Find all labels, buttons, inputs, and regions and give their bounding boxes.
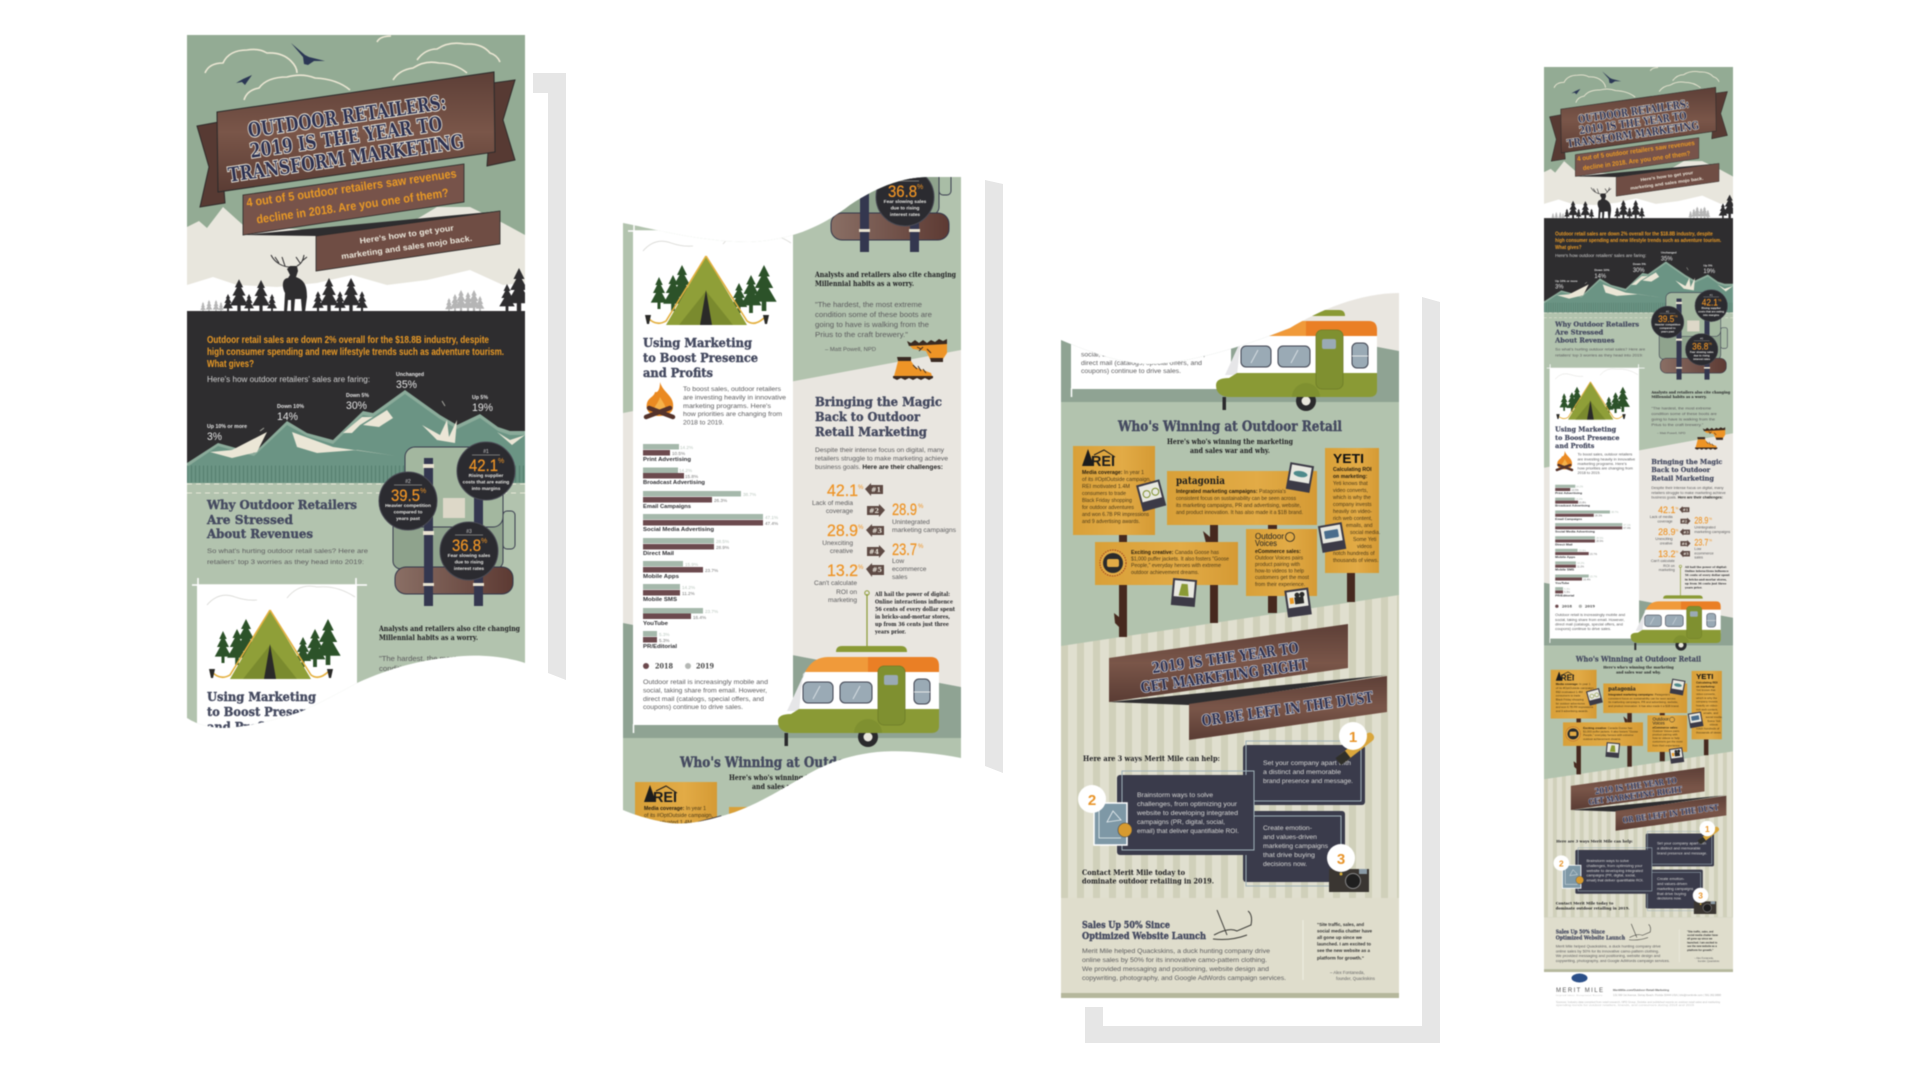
orange intro text — [207, 334, 504, 370]
sign: Yeti: Yeti knows that — [1333, 481, 1368, 487]
priorities intro text: marketing programs. Here's — [683, 403, 772, 410]
bar chart: marketing priorities 2018 vs 2019: 26.3% — [714, 498, 727, 503]
box 3: that drive buying — [1263, 852, 1315, 859]
sign posts — [1114, 525, 1355, 637]
sign: Canada Goose: $1,000 puffer jackets. It also fosters "Goose — [1131, 556, 1229, 562]
panel 3: winners, call to action and case study — [1060, 292, 1400, 998]
worry 2 — [379, 472, 437, 530]
challenge 4: 23.7 — [892, 540, 917, 559]
footer with Merit Mile logo: spending trends for outdoor retailers, brands, and consumers during 2018 and 2019 — [1556, 1004, 1695, 1007]
dark band: sales overview with mountain chart — [187, 311, 525, 493]
digital callout text — [874, 592, 955, 636]
mountain chart labels: 3% — [207, 431, 222, 443]
icon: Canada Goose badge — [1100, 550, 1126, 576]
white panel top edge — [196, 585, 358, 728]
sign: Yeti: heavily on video- — [1333, 509, 1372, 515]
icon: deer — [271, 255, 307, 312]
sign: Outdoor Voices: Outdoor Voices pairs — [1255, 556, 1304, 562]
icon: Merit Mile logo — [1572, 974, 1588, 982]
challenge 3: Unexciting — [822, 540, 853, 547]
worry 1 — [457, 442, 515, 500]
sign: Canada Goose — [1095, 542, 1238, 585]
banner: 2019 is the year — [1109, 624, 1348, 702]
chart legend: 2018 — [655, 662, 673, 670]
light green background band — [187, 482, 525, 777]
case study text: online sales by 50% for its innovative camo-pattern clothing. — [1082, 957, 1267, 964]
box 2: campaigns (PR, digital, social, — [1137, 819, 1225, 826]
contact line: dominate outdoor retailing in 2019. — [1082, 876, 1214, 886]
sign: Yeti: thousands of views. — [1333, 558, 1379, 564]
banner: 2019 is the year: 2019 IS THE YEAR TO — [1151, 639, 1300, 677]
worry 3: #3 — [466, 529, 472, 535]
clouds — [205, 36, 500, 100]
box 3: marketing campaigns — [1263, 843, 1329, 850]
footer with Merit Mile logo: Inspired Ideas. Exceptional Results. — [1556, 994, 1603, 997]
case study text: We provided messaging and positioning, website design and — [1082, 966, 1269, 973]
who's winning section — [1073, 419, 1380, 637]
millennial habits text and quote: condition some of these boots are — [815, 310, 932, 319]
priorities intro text: 2018 to 2019. — [683, 420, 724, 426]
challenges intro text: business goals. Here are their challenges: — [815, 464, 943, 471]
bar chart: marketing priorities 2018 vs 2019: 14.2% — [682, 585, 695, 590]
white panel bottom part — [1071, 295, 1231, 389]
mobile and social text — [634, 679, 768, 733]
step 3 badge with camera: 3 — [1337, 851, 1345, 868]
priorities content — [643, 382, 786, 670]
worry 3 — [440, 522, 498, 580]
challenge 5: #5 — [872, 566, 882, 574]
mojo ribbon: marketing and sales mojo back. — [341, 234, 473, 261]
sign: Outdoor Voices: eCommerce sales: — [1255, 549, 1301, 555]
beige band and trailer hill — [623, 350, 961, 738]
case study text: copywriting, photography, and Google AdWords campaign services. — [1082, 975, 1286, 982]
bar chart: marketing priorities 2018 vs 2019: Mobile Apps — [643, 574, 679, 580]
footer with Merit Mile logo: 131 NW 1st Avenue, Delray Beach, Florida 33444 USA | info@meritmile.com | 561.362.8888 — [1613, 994, 1722, 997]
challenge 1: 42.1 — [827, 481, 858, 500]
worry 1: #1 — [483, 449, 489, 455]
testimonial quote — [1317, 922, 1375, 981]
call to action section — [1078, 624, 1387, 892]
box 1: a distinct and memorable — [1263, 769, 1341, 776]
sign: Yeti: notch hundreds of — [1333, 551, 1375, 557]
sign: Canada Goose: People," everyday heroes with extreme — [1131, 563, 1221, 569]
challenge 3 — [822, 521, 884, 555]
heading: who's winning: Who's Winning at Outdoor Retail — [1117, 419, 1342, 435]
icon: campfire — [646, 382, 673, 417]
sign: Yeti: Some Yeti — [1353, 537, 1376, 543]
contact line — [1082, 868, 1214, 886]
sign: Patagonia: patagonia — [1176, 476, 1225, 487]
testimonial quote: – Alex Fontaneda, — [1330, 970, 1365, 975]
bar chart: marketing priorities 2018 vs 2019: 5.3% — [659, 632, 669, 637]
icon: hiking boots — [893, 339, 947, 380]
mountain chart labels: 14% — [277, 411, 298, 423]
footer with Merit Mile logo — [1556, 974, 1722, 1007]
chart legend: 2019 — [696, 662, 714, 670]
challenge 5: Can't calculate — [814, 580, 857, 587]
heading: using marketing: and Profits — [643, 365, 713, 380]
sign: Patagonia — [1167, 471, 1317, 525]
sign: Patagonia: Integrated marketing campaigns: Patagonia's — [1176, 489, 1286, 495]
challenge 1: coverage — [826, 508, 853, 515]
heading: why retailers are stressed — [206, 497, 368, 566]
worries intro text: So what's hurting outdoor retail sales? Here are — [207, 548, 368, 555]
challenge 5 — [814, 561, 884, 604]
panel 1: hero, sales overview and revenue worries — [186, 34, 526, 729]
sign: REI: for outdoor adventures — [1082, 505, 1134, 511]
bar chart: marketing priorities 2018 vs 2019: 15.8% — [685, 474, 698, 479]
sign: REI: and won 6.7B PR impressions — [1082, 512, 1149, 518]
bar chart: marketing priorities 2018 vs 2019: 23.7% — [705, 609, 718, 614]
step 1 badge with champagne bottle: 1 — [1349, 729, 1357, 746]
sign: REI: consumers to trade — [1082, 491, 1126, 497]
case study section — [1082, 910, 1375, 982]
bar chart: marketing priorities 2018 vs 2019: 28.9% — [716, 545, 729, 550]
case study text: Merit Mile helped Quackskins, a duck hunting company drive — [1082, 948, 1270, 955]
tent and marketing heading — [628, 224, 803, 380]
heading: bringing the magic — [815, 394, 942, 439]
bar chart: marketing priorities 2018 vs 2019: 14.2% — [679, 468, 692, 473]
mobile and social text: Outdoor retail is increasingly mobile and — [643, 679, 768, 686]
bar chart: marketing priorities 2018 vs 2019: 10.5% — [672, 451, 685, 456]
main title ribbon: 2019 IS THE YEAR TO — [248, 111, 444, 163]
testimonial quote: launched. I am excited to — [1317, 942, 1371, 948]
challenge 2: Unintegrated — [892, 519, 930, 526]
challenge 5: ROI on — [836, 589, 857, 596]
icon: camper trailer — [778, 591, 939, 747]
case study text — [1082, 948, 1286, 982]
worry 3: % — [481, 538, 487, 545]
subheading — [1167, 437, 1293, 455]
priorities intro text: To boost sales, outdoor retailers — [683, 386, 782, 393]
box 2: Brainstorm ways to solve — [1137, 792, 1213, 799]
priorities intro text: are investing heavily in innovative — [683, 394, 786, 402]
box 3 — [1243, 811, 1345, 886]
worries intro text: retailers' top 3 worries as they head into 2019: — [207, 559, 364, 566]
challenge 4 — [867, 540, 927, 581]
sign: Patagonia: its marketing campaigns, PR and advertising, website, — [1176, 503, 1301, 509]
heading: bringing the magic: Back to Outdoor — [815, 409, 920, 424]
challenge 5: % — [858, 565, 864, 571]
sign: Outdoor Voices: Outdoor — [1255, 531, 1284, 541]
box 2 — [1117, 771, 1254, 855]
heading: sales up 50% — [1082, 920, 1206, 942]
bar chart: marketing priorities 2018 vs 2019: Direct Mail — [643, 551, 675, 557]
worry 3: interest rates — [454, 566, 484, 572]
challenges intro text — [815, 447, 948, 471]
bar chart: marketing priorities 2018 vs 2019: Broadcast Advertising — [643, 480, 705, 486]
step 3 badge with camera — [1327, 844, 1369, 892]
worry 2: Heavier competition — [385, 503, 431, 509]
box 3: Create emotion- — [1263, 825, 1312, 832]
challenge 5: marketing — [828, 597, 857, 604]
orange intro text: What gives? — [207, 358, 254, 370]
mobile and social text: social, taking share from email. However, — [643, 688, 767, 694]
worry 1: % — [498, 458, 504, 465]
box 2: website to developing integrated — [1136, 810, 1238, 817]
priorities intro text: how priorities are changing from — [683, 411, 782, 418]
sign: REI: Media coverage: In year 1 — [1082, 470, 1144, 476]
testimonial quote: "Site traffic, sales, and — [1317, 922, 1364, 928]
bar chart: marketing priorities 2018 vs 2019: 14.2% — [680, 445, 693, 450]
worry 2: 39.5 — [391, 486, 420, 505]
testimonial quote: social media chatter have — [1317, 928, 1372, 934]
box 3: decisions now. — [1263, 861, 1307, 868]
backpack with top three worries — [379, 442, 515, 606]
icon: backpack — [393, 447, 515, 606]
challenge 2 — [867, 500, 957, 534]
bar chart: marketing priorities 2018 vs 2019 — [643, 444, 778, 650]
footer with Merit Mile logo: Sources: Industry data compiled from retail research, NPD Group, Deloitte and published reports on outdoor retail sales and marketing — [1556, 1001, 1721, 1004]
worry 2: years past — [396, 516, 420, 522]
testimonial quote: see the new website as a — [1317, 948, 1370, 954]
challenge 1: Lack of media — [812, 500, 853, 507]
sign: Yeti: Calculating ROI — [1333, 467, 1372, 473]
millennial habits text and quote: Millennial habits as a worry. — [815, 279, 914, 288]
white marketing panel — [633, 231, 793, 725]
worry 3: Fear slowing sales — [448, 553, 491, 559]
sign: Yeti: emails, and — [1346, 523, 1373, 529]
challenge 3: creative — [830, 548, 853, 555]
challenge 4: % — [918, 544, 924, 550]
worry 1: 42.1 — [469, 456, 498, 475]
footer with Merit Mile logo: MERIT MILE — [1556, 988, 1603, 994]
panel 2: marketing priorities and challenges — [622, 176, 962, 824]
heading: why retailers are stressed: Why Outdoor Retailers — [206, 497, 357, 512]
heading: bringing the magic: Bringing the Magic — [815, 394, 942, 409]
bar chart: marketing priorities 2018 vs 2019: 47.4% — [765, 521, 778, 526]
priorities intro text — [683, 386, 786, 426]
sign: Yeti: YETI — [1333, 451, 1364, 466]
challenge 4: ecommerce — [892, 566, 927, 573]
sign: Yeti: company invests — [1333, 502, 1372, 508]
sign: Outdoor Voices — [1246, 529, 1317, 596]
icon: cooler photo — [1318, 522, 1346, 553]
full-length infographic — [1544, 67, 1736, 972]
bar chart: marketing priorities 2018 vs 2019: Print Advertising — [643, 457, 691, 463]
challenges intro text: Despite their intense focus on digital, many — [815, 447, 945, 454]
sign: Outdoor Voices: customers get the most — [1255, 575, 1309, 581]
bar chart: marketing priorities 2018 vs 2019: 11.2% — [682, 591, 695, 596]
sign: REI: REI motivated 1.4M — [1082, 484, 1130, 490]
mountain illustration — [187, 390, 525, 483]
millennial habits text and quote: going to have is walking from the — [815, 320, 929, 329]
subheading: Here's who's winning the marketing — [1167, 437, 1293, 446]
bar chart: marketing priorities 2018 vs 2019: 28.5% — [716, 539, 729, 544]
sign: Yeti: on marketing: — [1333, 474, 1368, 480]
chart intro: Here's how outdoor retailers' sales are faring: — [207, 375, 370, 384]
icon: jacket photo — [1171, 578, 1197, 607]
worry 3: 36.8 — [452, 536, 481, 555]
sign: Outdoor Voices: from their experience. — [1255, 582, 1305, 588]
heading: sales up 50%: Sales Up 50% Since — [1082, 920, 1170, 931]
challenges section — [812, 394, 957, 636]
sign: REI: of its #OptOutside campaign, — [1082, 477, 1151, 483]
lower green band — [622, 738, 962, 817]
intro line: three ways: Here are 3 ways Merit Mile can help: — [1083, 754, 1220, 763]
icon: duck and shotgun — [1213, 910, 1252, 940]
subhead ribbon: 4 out of 5 outdoor retailers saw revenues — [246, 166, 458, 210]
sign: Canada Goose: Exciting creative: Canada Goose has — [1131, 550, 1219, 556]
digital callout text: years prior. — [874, 630, 906, 636]
heading: why retailers are stressed: Are Stressed — [206, 512, 293, 527]
mountain chart labels: Down 5% — [346, 393, 370, 399]
main title ribbon: OUTDOOR RETAILERS: — [246, 90, 448, 142]
footer with Merit Mile logo: MeritMile.com/Outdoor-Retail-Marketing — [1613, 988, 1669, 992]
challenge 4: #4 — [869, 548, 879, 556]
mountain chart labels: 35% — [396, 379, 417, 391]
testimonial quote: all gone up since we — [1317, 935, 1362, 941]
sign: Yeti: video converts, — [1333, 488, 1368, 494]
icon: bicycle photo — [1136, 479, 1166, 512]
bar chart: marketing priorities 2018 vs 2019: Mobile SMS — [643, 597, 677, 603]
contact line: Contact Merit Mile today to — [1082, 868, 1185, 877]
sign: Yeti: social media. — [1350, 530, 1380, 536]
panel 4: full infographic overview with footer — [1543, 66, 1734, 1007]
step 2 badge with blueprint: 2 — [1088, 792, 1096, 809]
box 1: Set your company apart with — [1263, 760, 1351, 767]
millennial habits text and quote: – Matt Powell, NPD — [825, 347, 876, 353]
challenge 1: % — [858, 485, 864, 491]
bar chart: marketing priorities 2018 vs 2019: 5.3% — [659, 638, 669, 643]
icon: video camera photo — [1284, 587, 1312, 618]
subhead ribbon — [243, 164, 464, 235]
challenge 3: % — [858, 525, 864, 531]
icon: REI logo: REI — [1091, 453, 1115, 470]
heading: why retailers are stressed: About Revenues — [206, 526, 313, 541]
mojo ribbon: Here's how to get your — [359, 223, 454, 246]
challenge 2: % — [918, 504, 924, 510]
bar chart: marketing priorities 2018 vs 2019: 38.7% — [743, 492, 756, 497]
icon: tent with trees — [643, 232, 791, 325]
bar chart: marketing priorities 2018 vs 2019: PR/Editorial — [643, 644, 678, 650]
sign: Yeti: which is why the — [1333, 495, 1371, 501]
mountain chart labels — [207, 372, 493, 443]
box 3: and values-driven — [1263, 834, 1317, 841]
millennial habits text and quote: Prius to the craft brewery." — [815, 330, 908, 339]
mountain chart labels: 30% — [346, 400, 367, 412]
bar chart: marketing priorities 2018 vs 2019: 47.1% — [765, 515, 778, 520]
sign: REI — [1073, 446, 1155, 535]
bar chart: marketing priorities 2018 vs 2019: 16.4% — [693, 615, 706, 620]
millennial habits text and quote: "The hardest, the most extreme — [815, 300, 922, 309]
mobile and social text: coupons) continue to drive sales. — [643, 704, 743, 711]
challenge 2: 28.9 — [892, 500, 917, 519]
sign: REI: and 9 advertising awards. — [1082, 519, 1140, 525]
sign: Yeti: rich web content, — [1333, 516, 1372, 522]
sign: REI: Black Friday shopping — [1082, 498, 1132, 504]
chart legend — [643, 662, 714, 670]
subhead ribbon: decline in 2018. Are you one of them? — [255, 186, 449, 226]
box 1 — [1243, 741, 1365, 805]
digital callout text: in bricks-and-mortar stores, — [875, 614, 950, 620]
worry 3: due to rising — [455, 560, 483, 566]
icon: birds — [236, 43, 325, 85]
banner: 2019 is the year: GET MARKETING RIGHT — [1139, 655, 1310, 697]
millennial habits text and quote — [814, 270, 956, 353]
challenge 3: 28.9 — [827, 521, 858, 540]
banner: left in the dust — [1189, 676, 1387, 740]
worry 2: % — [420, 488, 426, 495]
bar chart: marketing priorities 2018 vs 2019: Social Media Advertising — [643, 527, 714, 533]
challenge 3: #3 — [872, 527, 882, 535]
heading: using marketing: Using Marketing — [643, 335, 752, 350]
icon: fish photo — [1286, 462, 1314, 493]
mobile and social text: direct mail (catalogs, special offers, and — [643, 696, 764, 703]
worry 2: #2 — [405, 479, 411, 485]
challenge 2: #2 — [869, 507, 879, 515]
mountain chart labels: Up 10% or more — [207, 424, 247, 430]
worry 1: Rising supplier — [469, 473, 503, 479]
challenge 4: sales — [892, 574, 908, 581]
main title ribbon — [197, 72, 515, 207]
sign: Yeti: videos — [1357, 544, 1372, 550]
step 1 badge with champagne bottle — [1336, 722, 1376, 765]
digital callout text: up from 36 cents just three — [875, 622, 949, 628]
bar chart: marketing priorities 2018 vs 2019: 15.9% — [685, 562, 698, 567]
digital callout text: All hail the power of digital: — [874, 592, 950, 598]
challenge 2: marketing campaigns — [892, 527, 957, 534]
sign: Outdoor Voices: how-to videos to help — [1255, 568, 1304, 574]
mountain chart labels: Up 5% — [472, 395, 489, 401]
hero section — [187, 35, 531, 312]
mojo ribbon — [316, 211, 500, 271]
mountain chart labels: Down 10% — [277, 404, 305, 410]
heading: using marketing: to Boost Presence — [643, 350, 758, 365]
bar chart: marketing priorities 2018 vs 2019: 23.7% — [705, 568, 718, 573]
photos pinned on the signs — [1136, 462, 1346, 618]
challenge 1: #1 — [871, 486, 881, 494]
testimonial quote: platform for growth." — [1317, 956, 1364, 962]
challenges intro text: retailers struggle to make marketing achieve — [815, 456, 948, 462]
sign: Yeti — [1325, 448, 1380, 573]
heading: sales up 50%: Optimized Website Launch — [1082, 931, 1206, 942]
sign: Patagonia: and product innovation. It has also made it a $1B brand. — [1176, 510, 1303, 516]
challenge 1 — [812, 481, 883, 515]
subheading: and sales war and why. — [1190, 446, 1270, 455]
challenge 5: 13.2 — [827, 561, 858, 580]
worry 2: compared to — [394, 510, 422, 516]
icon: pin — [1286, 532, 1294, 542]
box 2: email) that deliver quantifiable ROI. — [1137, 828, 1239, 835]
sign: Canada Goose: outdoor achievement dreams. — [1131, 570, 1199, 576]
mountain chart labels: 19% — [472, 402, 493, 414]
digital callout text: Online interactions influence — [875, 600, 953, 606]
box 2: challenges, from optimizing your — [1137, 801, 1238, 808]
sign: Outdoor Voices: Voices — [1255, 538, 1277, 548]
tree line — [200, 268, 531, 312]
challenge 4: Low — [892, 558, 904, 565]
worries intro text — [207, 548, 368, 566]
snowy mountains — [187, 207, 525, 312]
bar chart: marketing priorities 2018 vs 2019: YouTube — [643, 621, 668, 627]
bar chart: marketing priorities 2018 vs 2019: Email Campaigns — [643, 504, 691, 510]
main title ribbon: TRANSFORM MARKETING — [227, 129, 465, 187]
worry 1: costs that are eating — [463, 480, 509, 486]
heading: using marketing — [643, 335, 758, 380]
heading: bringing the magic: Retail Marketing — [815, 424, 927, 439]
testimonial quote: founder, Quackskins — [1336, 976, 1375, 981]
lower background with stripes and footer band — [1061, 402, 1399, 998]
worry 1: into margins — [472, 486, 501, 492]
sign: Patagonia: consistent focus on sustainability can be seen across — [1176, 496, 1296, 502]
box 1: brand presence and message. — [1263, 778, 1353, 785]
step 2 badge with blueprint — [1078, 785, 1132, 845]
sign: Outdoor Voices: product pairing with — [1255, 562, 1300, 568]
mountain chart labels: Unchanged — [396, 372, 424, 378]
